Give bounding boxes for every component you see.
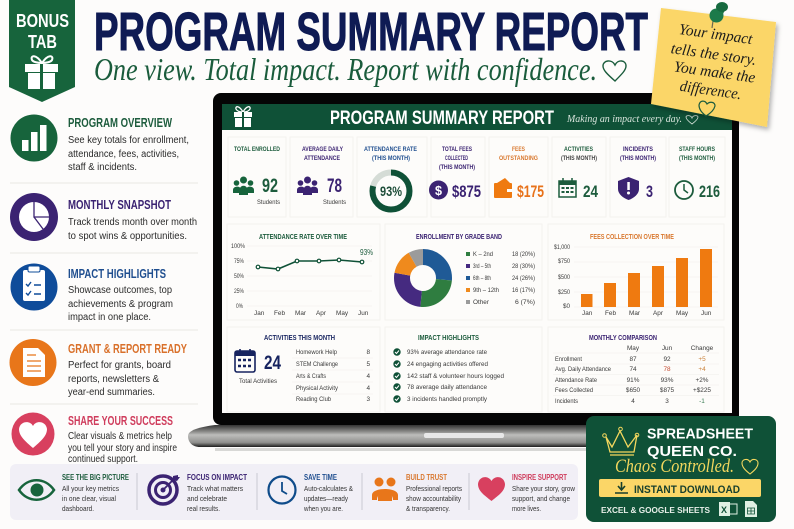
- panel: monthly comparison table: 3: [665, 398, 669, 405]
- brand badge: [586, 416, 776, 522]
- chart: enrollment by grade band: 24 (26%): [512, 275, 535, 282]
- sticky note: tells the story.: [670, 40, 757, 69]
- chart: enrollment by grade band: Other: [473, 299, 490, 306]
- sidebar: share your success: you tell your story and inspire: [68, 443, 177, 454]
- panel: monthly comparison table: 87: [629, 356, 637, 363]
- panel: monthly comparison table: +$225: [693, 387, 711, 394]
- kpi: total enrolled: 92: [262, 176, 278, 197]
- panel: monthly comparison table: $650: [626, 387, 641, 394]
- chart: enrollment by grade band: 28 (30%): [512, 263, 535, 270]
- kpi: total enrolled: TOTAL ENROLLED: [234, 146, 280, 153]
- panel: monthly comparison table: Jun: [662, 345, 673, 352]
- sidebar: share your success: Clear visuals & metrics help: [68, 431, 172, 442]
- panel: activities this month: Physical Activity: [296, 385, 339, 392]
- panel: activities this month: STEM Challenge: [296, 361, 338, 368]
- benefit: see the big picture: dashboard.: [62, 504, 94, 513]
- sidebar: monthly snapshot: to spot wins & opportunities.: [68, 231, 187, 242]
- chart: enrollment by grade band: 3rd – 5th: [473, 263, 491, 270]
- panel: monthly comparison table: +5: [698, 356, 706, 363]
- sidebar: program overview: See key totals for enrollment,: [68, 135, 189, 146]
- chart: fees collection over time: Apr: [653, 310, 664, 317]
- panel: monthly comparison table: 78: [663, 366, 671, 373]
- chart: enrollment by grade band: [385, 224, 542, 320]
- sidebar: share your success: continued support.: [68, 454, 138, 465]
- panel: monthly comparison table: -1: [699, 398, 705, 405]
- benefit: inspire support: Share your story, grow: [512, 484, 576, 493]
- panel: monthly comparison table: 93%: [661, 377, 674, 384]
- dashboard header: PROGRAM SUMMARY REPORT: [330, 108, 554, 129]
- benefit: focus on impact: [149, 473, 247, 513]
- panel: impact highlights: 142 staff & volunteer hours logged: [407, 373, 504, 380]
- panel: activities this month: Arts & Crafts: [296, 373, 326, 380]
- sidebar: grant and report ready: GRANT & REPORT READY: [68, 341, 187, 356]
- panel: activities this month: [227, 327, 380, 412]
- bonus tab ribbon: TAB: [28, 32, 57, 52]
- chart: fees collection over time: $500: [558, 274, 570, 281]
- kpi: average daily attendance: Students: [323, 199, 346, 206]
- kpi: total fees collected: COLLECTED: [445, 155, 468, 162]
- chart: attendance rate over time: ATTENDANCE RATE OVER TIME: [259, 232, 347, 241]
- chart: enrollment by grade band: 18 (20%): [512, 251, 535, 258]
- panel: impact highlights: 3 incidents handled promptly: [407, 396, 488, 403]
- panel: monthly comparison table: $875: [660, 387, 675, 394]
- sidebar: monthly snapshot: Track trends month over month: [68, 217, 197, 228]
- sidebar: program overview: [10, 114, 189, 173]
- sidebar: share your success: SHARE YOUR SUCCESS: [68, 413, 173, 428]
- dashboard header: [222, 104, 732, 130]
- chart: fees collection over time: $0: [563, 303, 570, 310]
- benefit: inspire support: support, and change: [512, 494, 570, 503]
- benefit: inspire support: more lives.: [512, 504, 541, 513]
- chart: enrollment by grade band: 6 (7%): [515, 299, 535, 306]
- chart: attendance rate over time: Mar: [295, 310, 307, 317]
- sticky note: Your impact: [678, 21, 754, 48]
- kpi: activities: [552, 137, 606, 217]
- sidebar: grant and report ready: [10, 339, 187, 398]
- panel: monthly comparison table: May: [627, 345, 640, 352]
- sidebar: share your success: [12, 412, 177, 465]
- chart: attendance rate over time: [227, 224, 380, 320]
- kpi: activities: ACTIVITIES: [564, 146, 593, 153]
- panel: impact highlights: [385, 327, 542, 412]
- sticky note: difference.: [679, 78, 743, 103]
- chart: fees collection over time: FEES COLLECTION OVER TIME: [590, 232, 674, 241]
- benefit: build trust: Professional reports: [406, 484, 462, 493]
- panel: monthly comparison table: +2%: [696, 377, 709, 384]
- benefit: inspire support: INSPIRE SUPPORT: [512, 473, 567, 482]
- chart: fees collection over time: [548, 224, 724, 320]
- brand badge: QUEEN CO.: [647, 443, 737, 460]
- sidebar: monthly snapshot: MONTHLY SNAPSHOT: [68, 197, 171, 212]
- kpi: average daily attendance: 78: [327, 176, 342, 197]
- icon: excel: [719, 502, 737, 516]
- chart: fees collection over time: Mar: [629, 310, 641, 317]
- panel: monthly comparison table: Attendance Rate: [555, 377, 597, 384]
- panel: monthly comparison table: 92: [663, 356, 671, 363]
- kpi: total enrolled: Students: [257, 199, 280, 206]
- benefit: build trust: show accountability: [406, 494, 461, 503]
- sidebar: grant and report ready: reports, newsletters &: [68, 374, 159, 385]
- benefit: build trust: [372, 473, 462, 513]
- panel: monthly comparison table: Fees Collected: [555, 387, 593, 394]
- panel: activities this month: 4: [366, 373, 370, 380]
- chart: fees collection over time: May: [676, 310, 689, 317]
- kpi: staff hours: 216: [699, 182, 720, 201]
- benefit: save time: updates—ready: [304, 494, 348, 503]
- sidebar: grant and report ready: year-end summaries.: [68, 387, 155, 398]
- chart: attendance rate over time: Jan: [254, 310, 265, 317]
- bonus tab ribbon: BONUS: [16, 11, 69, 31]
- brand badge: EXCEL & GOOGLE SHEETS: [601, 505, 710, 515]
- chart: fees collection over time: Jun: [701, 310, 712, 317]
- chart: attendance rate over time: 75%: [234, 258, 244, 265]
- kpi: activities: 24: [583, 182, 598, 201]
- benefit: inspire support: [478, 473, 576, 513]
- benefit: see the big picture: [19, 473, 130, 513]
- kpi: total enrolled: [228, 137, 286, 217]
- kpi: total fees collected: (THIS MONTH): [439, 164, 475, 171]
- sidebar: impact highlights: achievements & program: [68, 299, 173, 310]
- chart: attendance rate over time: Feb: [274, 310, 285, 317]
- panel: activities this month: 24: [264, 353, 281, 374]
- panel: impact highlights: 93% average attendance rate: [407, 349, 487, 356]
- benefit: focus on impact: FOCUS ON IMPACT: [187, 473, 247, 482]
- kpi: incidents: [610, 137, 666, 217]
- kpi: incidents: INCIDENTS: [623, 146, 653, 153]
- panel: activities this month: ACTIVITIES THIS MONTH: [264, 333, 335, 342]
- icon: crown: [603, 427, 639, 455]
- panel: activities this month: 5: [366, 361, 370, 368]
- panel: activities this month: Homework Help: [296, 349, 337, 356]
- kpi: incidents: (THIS MONTH): [620, 155, 656, 162]
- sidebar: grant and report ready: Perfect for grants, board: [68, 360, 171, 371]
- kpi: total fees collected: $: [435, 183, 443, 198]
- laptop: [188, 93, 739, 451]
- sidebar: impact highlights: IMPACT HIGHLIGHTS: [68, 266, 166, 281]
- kpi: staff hours: [669, 137, 725, 217]
- kpi: attendance rate: [357, 137, 427, 217]
- panel: activities this month: 4: [366, 385, 370, 392]
- kpi: fees outstanding: [489, 137, 548, 217]
- sidebar: impact highlights: [10, 264, 173, 323]
- kpi: total fees collected: [429, 137, 485, 217]
- benefit: focus on impact: Track what matters: [187, 484, 243, 493]
- panel: activities this month: Reading Club: [296, 396, 331, 403]
- sidebar: impact highlights: impact in one place.: [68, 312, 151, 323]
- kpi: total fees collected: TOTAL FEES: [442, 146, 472, 153]
- chart: attendance rate over time: 0%: [236, 303, 243, 310]
- kpi: attendance rate: 93%: [380, 184, 402, 199]
- chart: fees collection over time: Jan: [582, 310, 593, 317]
- brand badge: SPREADSHEET: [647, 426, 753, 442]
- kpi: average daily attendance: [290, 137, 353, 217]
- chart: enrollment by grade band: K – 2nd: [473, 251, 493, 258]
- panel: impact highlights: 24 engaging activities offered: [407, 361, 488, 368]
- chart: fees collection over time: $250: [558, 289, 570, 296]
- dashboard header: Making an impact every day.: [566, 114, 682, 125]
- kpi: average daily attendance: ATTENDANCE: [304, 155, 340, 162]
- chart: attendance rate over time: 25%: [234, 288, 244, 295]
- chart: attendance rate over time: 50%: [234, 273, 244, 280]
- chart: enrollment by grade band: 6th – 8th: [473, 275, 491, 282]
- benefit: build trust: & transparency.: [406, 504, 450, 513]
- panel: monthly comparison table: Incidents: [555, 398, 578, 405]
- panel: impact highlights: 78 average daily attendance: [407, 384, 487, 391]
- sidebar: monthly snapshot: [10, 193, 197, 242]
- panel: impact highlights: IMPACT HIGHLIGHTS: [418, 333, 479, 342]
- benefit: save time: [268, 473, 353, 513]
- brand badge: Chaos Controlled.: [615, 456, 734, 477]
- kpi: incidents: 3: [646, 182, 653, 201]
- panel: activities this month: 3: [366, 396, 370, 403]
- benefit: save time: Auto-calculates &: [304, 484, 353, 493]
- chart: attendance rate over time: May: [336, 310, 349, 317]
- sidebar: impact highlights: Showcase outcomes, top: [68, 285, 172, 296]
- kpi: attendance rate: (THIS MONTH): [372, 155, 410, 162]
- bottom benefits band: [10, 464, 578, 520]
- benefit: see the big picture: All your key metrics: [62, 484, 119, 493]
- benefit: save time: when you are.: [303, 504, 343, 513]
- panel: monthly comparison table: Avg. Daily Attendance: [555, 366, 611, 373]
- benefit: see the big picture: SEE THE BIG PICTURE: [62, 473, 130, 482]
- chart: attendance rate over time: Jun: [358, 310, 369, 317]
- kpi: activities: (THIS MONTH): [561, 155, 597, 162]
- sticky note: [651, 8, 776, 127]
- panel: monthly comparison table: 74: [629, 366, 637, 373]
- kpi: fees outstanding: $175: [517, 182, 544, 201]
- benefit: see the big picture: in one clear, visual: [62, 494, 116, 503]
- panel: monthly comparison table: Change: [691, 345, 714, 352]
- panel: monthly comparison table: Enrollment: [555, 356, 582, 363]
- panel: monthly comparison table: 91%: [627, 377, 640, 384]
- benefit: focus on impact: and celebrate: [187, 494, 227, 503]
- sidebar: program overview: attendance, fees, activities,: [68, 149, 179, 160]
- chart: fees collection over time: Feb: [605, 310, 616, 317]
- sidebar: program overview: staff & incidents.: [68, 162, 137, 173]
- kpi: total fees collected: $875: [452, 182, 481, 201]
- kpi: staff hours: (THIS MONTH): [679, 155, 715, 162]
- panel: monthly comparison table: +4: [698, 366, 706, 373]
- kpi: fees outstanding: OUTSTANDING: [499, 155, 538, 162]
- kpi: attendance rate: ATTENDANCE RATE: [364, 146, 417, 153]
- sticky note: You make the: [673, 58, 757, 87]
- kpi: fees outstanding: FEES: [512, 146, 525, 153]
- benefit: build trust: BUILD TRUST: [406, 473, 447, 482]
- panel: activities this month: 8: [366, 349, 370, 356]
- kpi: average daily attendance: AVERAGE DAILY: [302, 146, 343, 153]
- sidebar: program overview: PROGRAM OVERVIEW: [68, 115, 173, 130]
- chart: fees collection over time: $750: [558, 258, 570, 265]
- panel: monthly comparison table: 4: [631, 398, 635, 405]
- chart: enrollment by grade band: 9th – 12th: [473, 287, 499, 294]
- panel: monthly comparison table: MONTHLY COMPARISON: [589, 333, 657, 342]
- benefit: focus on impact: real results.: [187, 504, 220, 513]
- icon: google sheets: [745, 501, 757, 517]
- chart: enrollment by grade band: ENROLLMENT BY GRADE BAND: [416, 232, 502, 241]
- benefit: save time: SAVE TIME: [304, 473, 338, 482]
- brand badge: INSTANT DOWNLOAD: [634, 484, 740, 496]
- chart: attendance rate over time: 100%: [231, 243, 245, 250]
- panel: monthly comparison table: [548, 327, 724, 412]
- chart: fees collection over time: $1,000: [554, 244, 570, 251]
- chart: enrollment by grade band: 16 (17%): [512, 287, 535, 294]
- bonus tab ribbon: [9, 0, 75, 102]
- icon: push pin: [710, 2, 728, 28]
- chart: attendance rate over time: Apr: [316, 310, 327, 317]
- panel: activities this month: Total Activities: [239, 378, 277, 385]
- chart: attendance rate over time: 93%: [360, 248, 373, 257]
- subtitle tagline: One view. Total impact. Report with confidence.: [94, 51, 597, 87]
- kpi: staff hours: STAFF HOURS: [679, 146, 715, 153]
- icon: excel: X: [721, 505, 727, 515]
